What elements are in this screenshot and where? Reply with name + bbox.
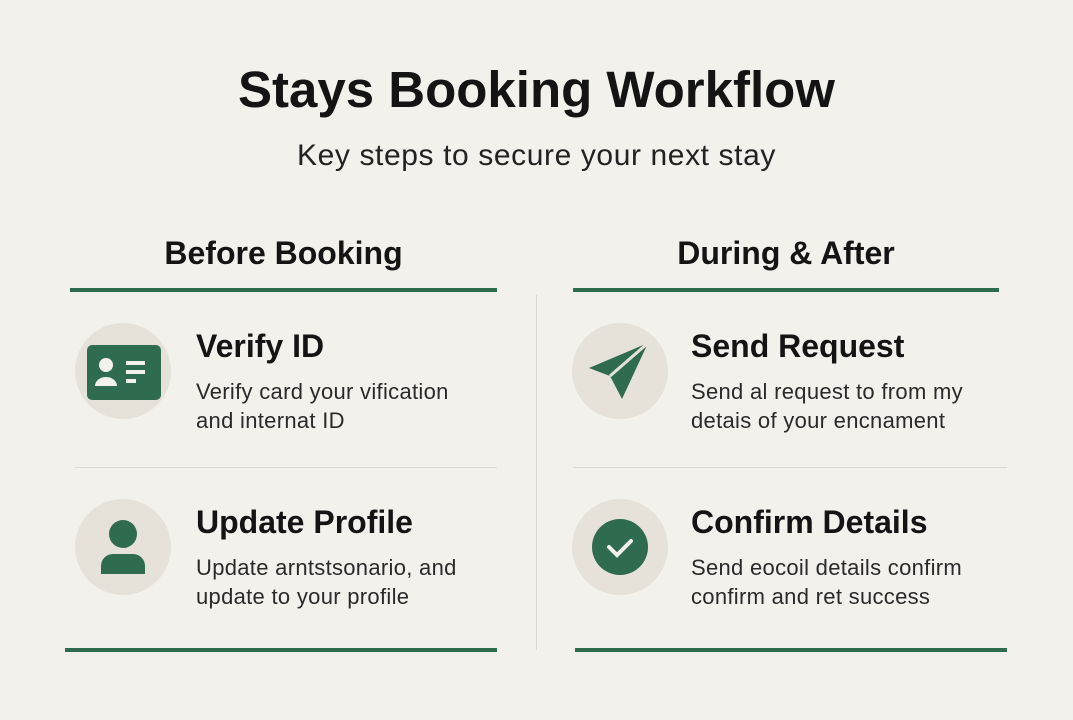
title: Stays Booking Workflow [238,61,835,118]
step: update profile [196,504,457,609]
step: verify id: Verify card your vification [196,379,449,404]
step: send request: detais of your encnament [691,408,945,433]
step: send request: Send Request [691,328,904,364]
step: update profile: Update Profile [196,504,413,540]
icon: send [572,323,668,419]
step: verify id [196,328,449,433]
step: verify id: and internat ID [196,408,345,433]
step: send request [691,328,963,433]
step: confirm details: Send eocoil details confirm [691,555,962,580]
step: confirm details: Confirm Details [691,504,927,540]
step: confirm details [691,504,962,609]
step: update profile: Update arntstsonario, and [196,555,457,580]
icon: id card [75,323,171,419]
subtitle: Key steps to secure your next stay [297,139,776,172]
icon: person [75,499,171,595]
icon: check [572,499,668,595]
step: update profile: update to your profile [196,584,409,609]
step: send request: Send al request to from my [691,379,963,404]
step: verify id: Verify ID [196,328,324,364]
step: confirm details: confirm and ret success [691,584,930,609]
heading: during & after: During & After [677,235,895,271]
heading: before booking: Before Booking [164,235,403,271]
